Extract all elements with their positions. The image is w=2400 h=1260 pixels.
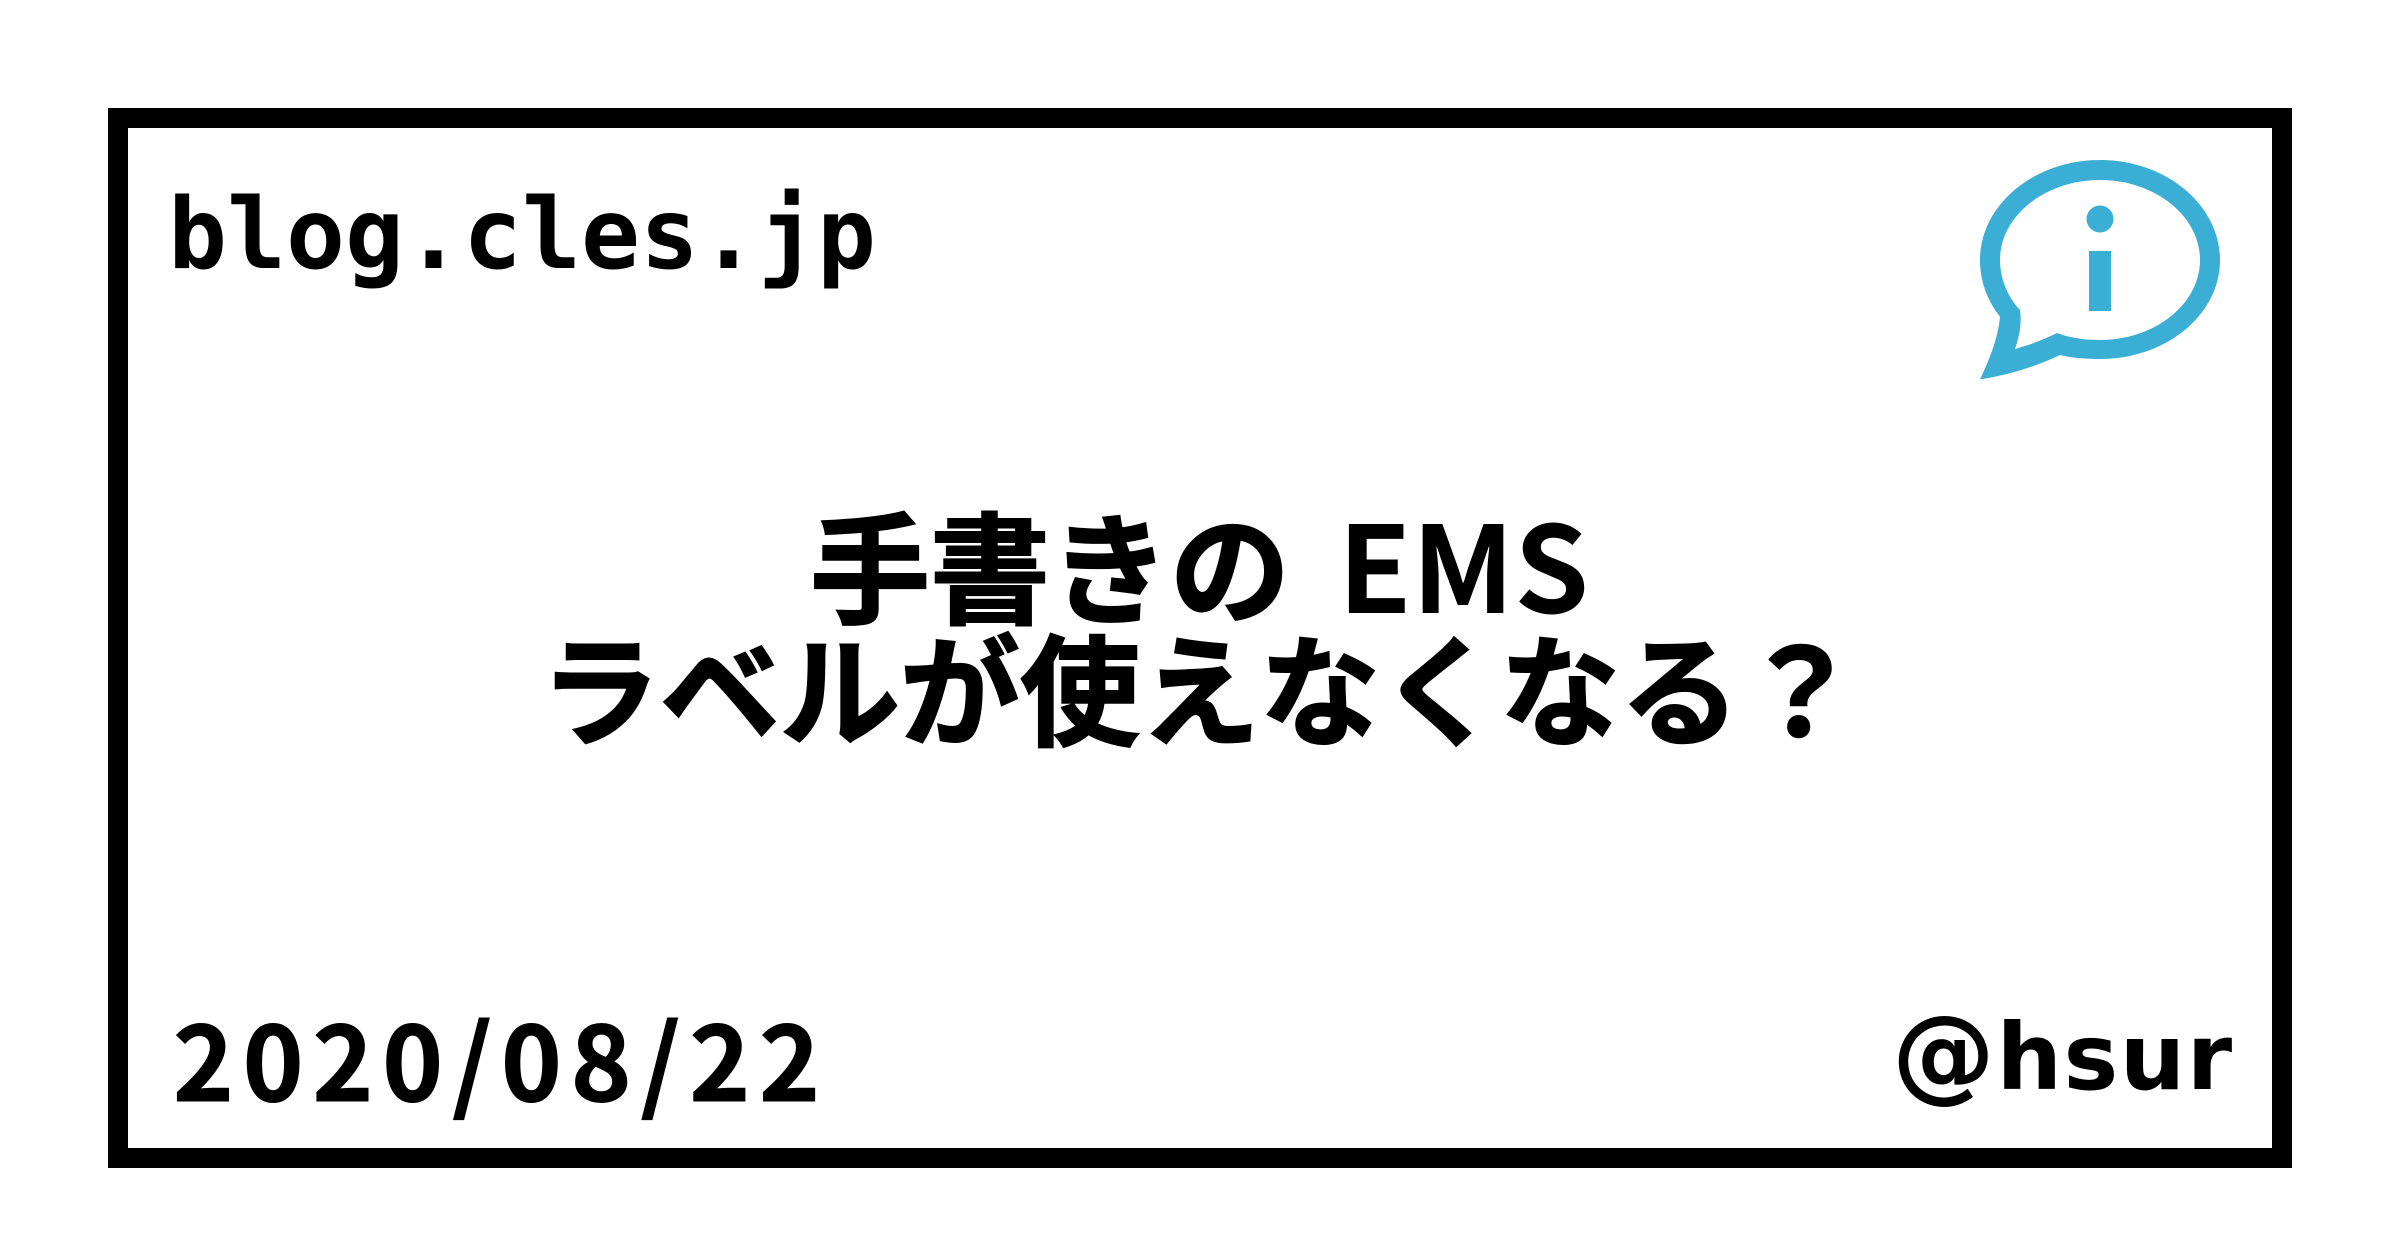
- card frame: [108, 108, 2292, 1168]
- date: 2020/08/22: [173, 982, 829, 1131]
- title line 1: EMS: [1338, 474, 1589, 648]
- title: [540, 474, 1860, 771]
- title line 1: [810, 474, 1589, 649]
- site name: blog.cles.jp: [168, 178, 876, 292]
- author handle: @hsur: [1892, 994, 2234, 1114]
- icon: info speech bubble: [1980, 160, 2220, 380]
- title line 1: 手書きの: [810, 475, 1290, 649]
- title line 2: ラベルが使えなくなる？: [540, 597, 1860, 771]
